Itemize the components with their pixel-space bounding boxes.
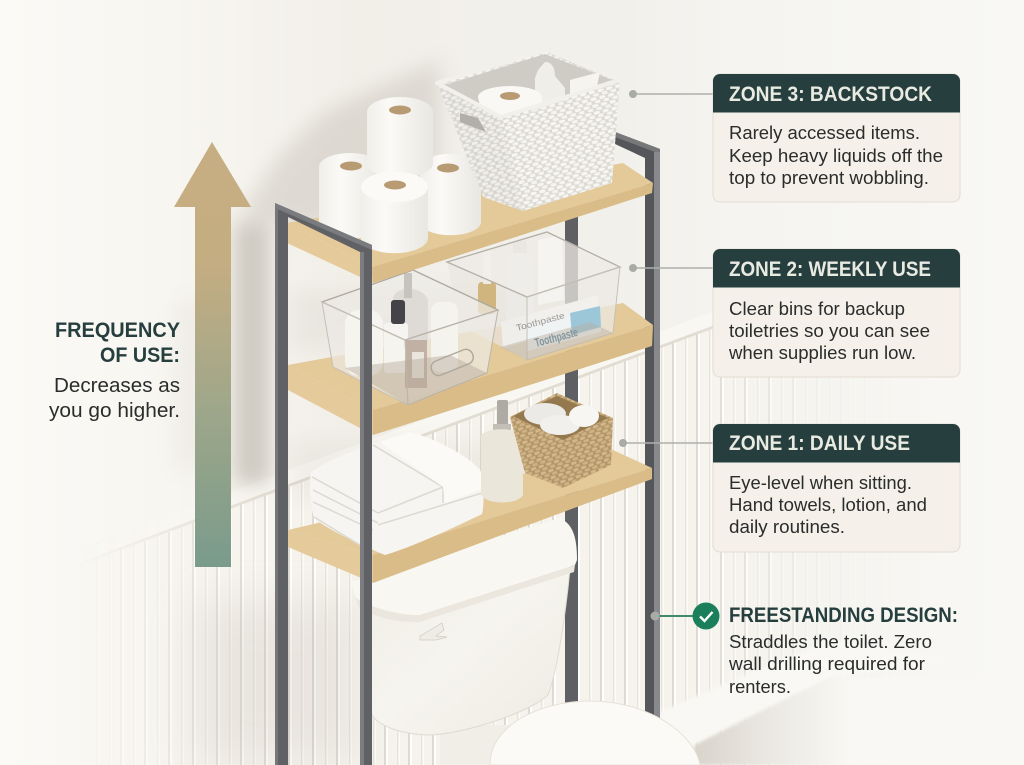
- frequency of use label: [49, 319, 180, 422]
- card zone 1: Eye-level when sitting.: [729, 473, 912, 493]
- frequency of use label: OF USE:: [100, 344, 180, 367]
- freestanding text: FREESTANDING DESIGN:: [729, 604, 958, 627]
- soap dispenser: [481, 400, 523, 502]
- front roll: [361, 172, 428, 253]
- freestanding text: Straddles the toilet. Zero: [729, 632, 932, 652]
- callout: zone 3: [629, 74, 960, 202]
- beadboard wainscot: [120, 326, 794, 765]
- card zone 3: [713, 74, 960, 202]
- white woven basket: [437, 50, 620, 211]
- card zone 2: ZONE 2: WEEKLY USE: [729, 258, 931, 281]
- floor and baseboard: [660, 640, 1024, 765]
- right clear bin: Toothpaste: [515, 310, 566, 333]
- card zone 3: Rarely accessed items.: [729, 123, 920, 143]
- icon: green check: [692, 602, 720, 630]
- toilet: [351, 518, 700, 765]
- freestanding text: wall drilling required for: [728, 654, 925, 674]
- wicker basket: [510, 393, 613, 488]
- card zone 1: [713, 424, 960, 552]
- bottom shelf: [288, 393, 652, 583]
- card zone 1: Hand towels, lotion, and: [729, 495, 927, 515]
- callout: zone 2: [629, 249, 960, 377]
- card zone 1: ZONE 1: DAILY USE: [729, 432, 910, 455]
- card zone 2: when supplies run low.: [728, 343, 916, 363]
- connector zone 1: [619, 439, 713, 447]
- flush handle: [420, 623, 447, 640]
- connector zone 2: [629, 264, 713, 272]
- front frame: [275, 203, 372, 765]
- card zone 3: top to prevent wobbling.: [729, 168, 929, 188]
- card zone 2: toiletries so you can see: [729, 321, 930, 341]
- towels: [310, 432, 484, 555]
- toilet paper rolls: [319, 97, 481, 253]
- right clear bin: Toothpaste: [533, 325, 579, 350]
- right roll: [420, 154, 481, 235]
- toilet seat and bowl: [440, 701, 700, 765]
- toilet tank: [360, 545, 572, 735]
- top shelf: [287, 50, 653, 283]
- wall shadows: [175, 60, 570, 765]
- frequency of use label: FREQUENCY: [55, 319, 180, 342]
- left clear bin: [322, 270, 498, 405]
- card zone 2: Clear bins for backup: [729, 299, 905, 319]
- card zone 2: [713, 249, 960, 377]
- callout: freestanding design: [650, 602, 958, 697]
- card zone 1: daily routines.: [729, 517, 845, 537]
- tank lid: [351, 518, 577, 622]
- top roll: [367, 97, 433, 178]
- right clear bin: [447, 232, 620, 360]
- middle shelf: [288, 232, 653, 435]
- connector zone 3: [629, 90, 713, 98]
- frequency of use label: Decreases as: [54, 375, 180, 397]
- left roll: [319, 153, 381, 239]
- freestanding text: [728, 604, 958, 697]
- frequency arrow: [174, 142, 251, 567]
- card zone 3: ZONE 3: BACKSTOCK: [729, 83, 932, 106]
- freestanding text: renters.: [729, 677, 791, 697]
- rear frame posts: [565, 132, 660, 722]
- card zone 3: Keep heavy liquids off the: [729, 146, 943, 166]
- connector freestanding: [650, 612, 695, 620]
- callout: zone 1: [619, 424, 960, 552]
- frequency of use label: you go higher.: [49, 400, 180, 422]
- wall background: [133, 48, 796, 765]
